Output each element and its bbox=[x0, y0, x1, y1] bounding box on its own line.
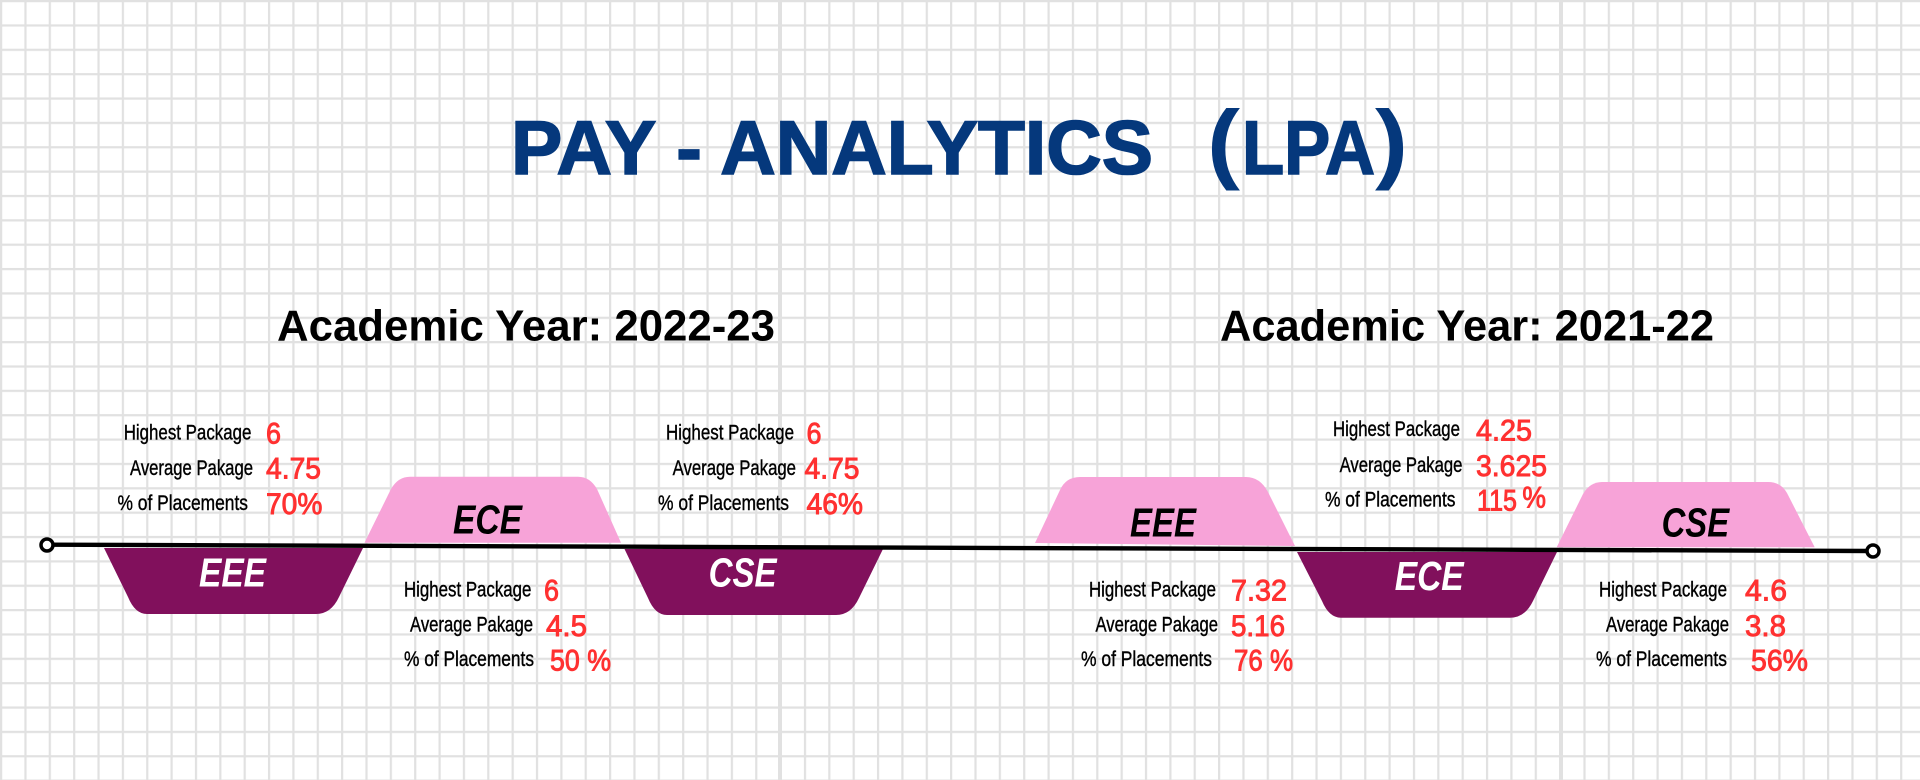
title: LPA bbox=[1242, 106, 1375, 191]
stats: EEE 2021-22: 7.32 bbox=[1231, 575, 1287, 608]
stats: ECE 2022-23 bbox=[404, 575, 611, 678]
stats: CSE 2022-23: Average Pakage bbox=[673, 456, 796, 480]
stats: CSE 2022-23: 4.75 bbox=[804, 452, 860, 485]
title: ( bbox=[1207, 92, 1241, 191]
stats: CSE 2022-23: % of Placements bbox=[658, 491, 789, 515]
stats: EEE 2021-22: 76 % bbox=[1234, 645, 1293, 678]
tab: ECE 2022-23 bbox=[364, 477, 621, 543]
tab: EEE 2022-23 bbox=[104, 548, 363, 614]
heading: academic year 2021-22: Academic Year: 2021-22 bbox=[1220, 302, 1714, 350]
tab: CSE 2021-22: CSE bbox=[1662, 500, 1730, 546]
title bbox=[511, 92, 1408, 191]
stats: EEE 2021-22: Highest Package bbox=[1089, 578, 1216, 602]
stats: CSE 2021-22: 3.8 bbox=[1745, 610, 1786, 643]
stats: ECE 2022-23: 4.5 bbox=[546, 610, 587, 643]
tab: EEE 2021-22: EEE bbox=[1130, 500, 1197, 546]
stats: CSE 2021-22: Highest Package bbox=[1599, 578, 1727, 602]
stats: CSE 2022-23: 46% bbox=[806, 488, 863, 521]
stats: CSE 2021-22: 56% bbox=[1751, 645, 1808, 678]
timeline axis bbox=[41, 539, 1879, 557]
stats: EEE 2022-23: Highest Package bbox=[124, 420, 251, 444]
stats: CSE 2022-23 bbox=[658, 417, 863, 521]
stats: ECE 2022-23: 50 % bbox=[550, 645, 611, 678]
stats: EEE 2022-23: 4.75 bbox=[266, 452, 321, 485]
stats: ECE 2021-22: Average Pakage bbox=[1340, 453, 1462, 477]
tab: CSE 2022-23 bbox=[624, 549, 883, 615]
tab: EEE 2021-22 bbox=[1035, 477, 1295, 546]
heading: academic year 2022-23: Academic Year: 2022-23 bbox=[277, 302, 775, 350]
title: PAY - ANALYTICS bbox=[511, 106, 1153, 191]
stats: EEE 2022-23: % of Placements bbox=[118, 491, 248, 515]
stats: ECE 2021-22: % bbox=[1522, 481, 1546, 514]
stats: CSE 2022-23: 6 bbox=[806, 417, 822, 450]
tab: ECE 2021-22: ECE bbox=[1395, 553, 1465, 599]
tab: CSE 2021-22 bbox=[1557, 482, 1815, 547]
stats: ECE 2022-23: Highest Package bbox=[404, 578, 531, 602]
stats: CSE 2021-22: Average Pakage bbox=[1606, 613, 1729, 637]
stats: CSE 2021-22: 4.6 bbox=[1745, 575, 1787, 608]
tab: ECE 2022-23: ECE bbox=[453, 496, 523, 542]
stats: EEE 2022-23 bbox=[118, 417, 322, 521]
stats: ECE 2022-23: % of Placements bbox=[404, 647, 534, 671]
stats: ECE 2021-22: Highest Package bbox=[1333, 417, 1460, 441]
stats: EEE 2021-22: 5.16 bbox=[1231, 610, 1285, 643]
stats: EEE 2021-22: % of Placements bbox=[1081, 647, 1212, 671]
stats: EEE 2022-23: 6 bbox=[266, 417, 281, 450]
tab: EEE 2022-23: EEE bbox=[199, 550, 267, 596]
tab: ECE 2021-22 bbox=[1297, 552, 1557, 618]
stats: CSE 2022-23: Highest Package bbox=[666, 420, 794, 444]
tab: CSE 2022-23: CSE bbox=[709, 550, 778, 596]
stats: ECE 2021-22: 115 bbox=[1477, 485, 1517, 518]
stats: CSE 2021-22: % of Placements bbox=[1596, 647, 1727, 671]
stats: EEE 2021-22: Average Pakage bbox=[1096, 613, 1218, 637]
stats: CSE 2021-22 bbox=[1596, 575, 1808, 678]
stats: EEE 2021-22 bbox=[1081, 575, 1293, 678]
stats: ECE 2021-22 bbox=[1325, 415, 1547, 518]
stats: ECE 2022-23: Average Pakage bbox=[410, 613, 533, 637]
stats: ECE 2021-22: 4.25 bbox=[1476, 415, 1532, 448]
stats: EEE 2022-23: 70% bbox=[266, 488, 322, 521]
title: ) bbox=[1375, 92, 1408, 191]
stats: ECE 2022-23: 6 bbox=[544, 575, 559, 608]
stats: ECE 2021-22: 3.625 bbox=[1476, 450, 1547, 483]
stats: ECE 2021-22: % of Placements bbox=[1325, 488, 1456, 512]
stats: EEE 2022-23: Average Pakage bbox=[130, 456, 253, 480]
